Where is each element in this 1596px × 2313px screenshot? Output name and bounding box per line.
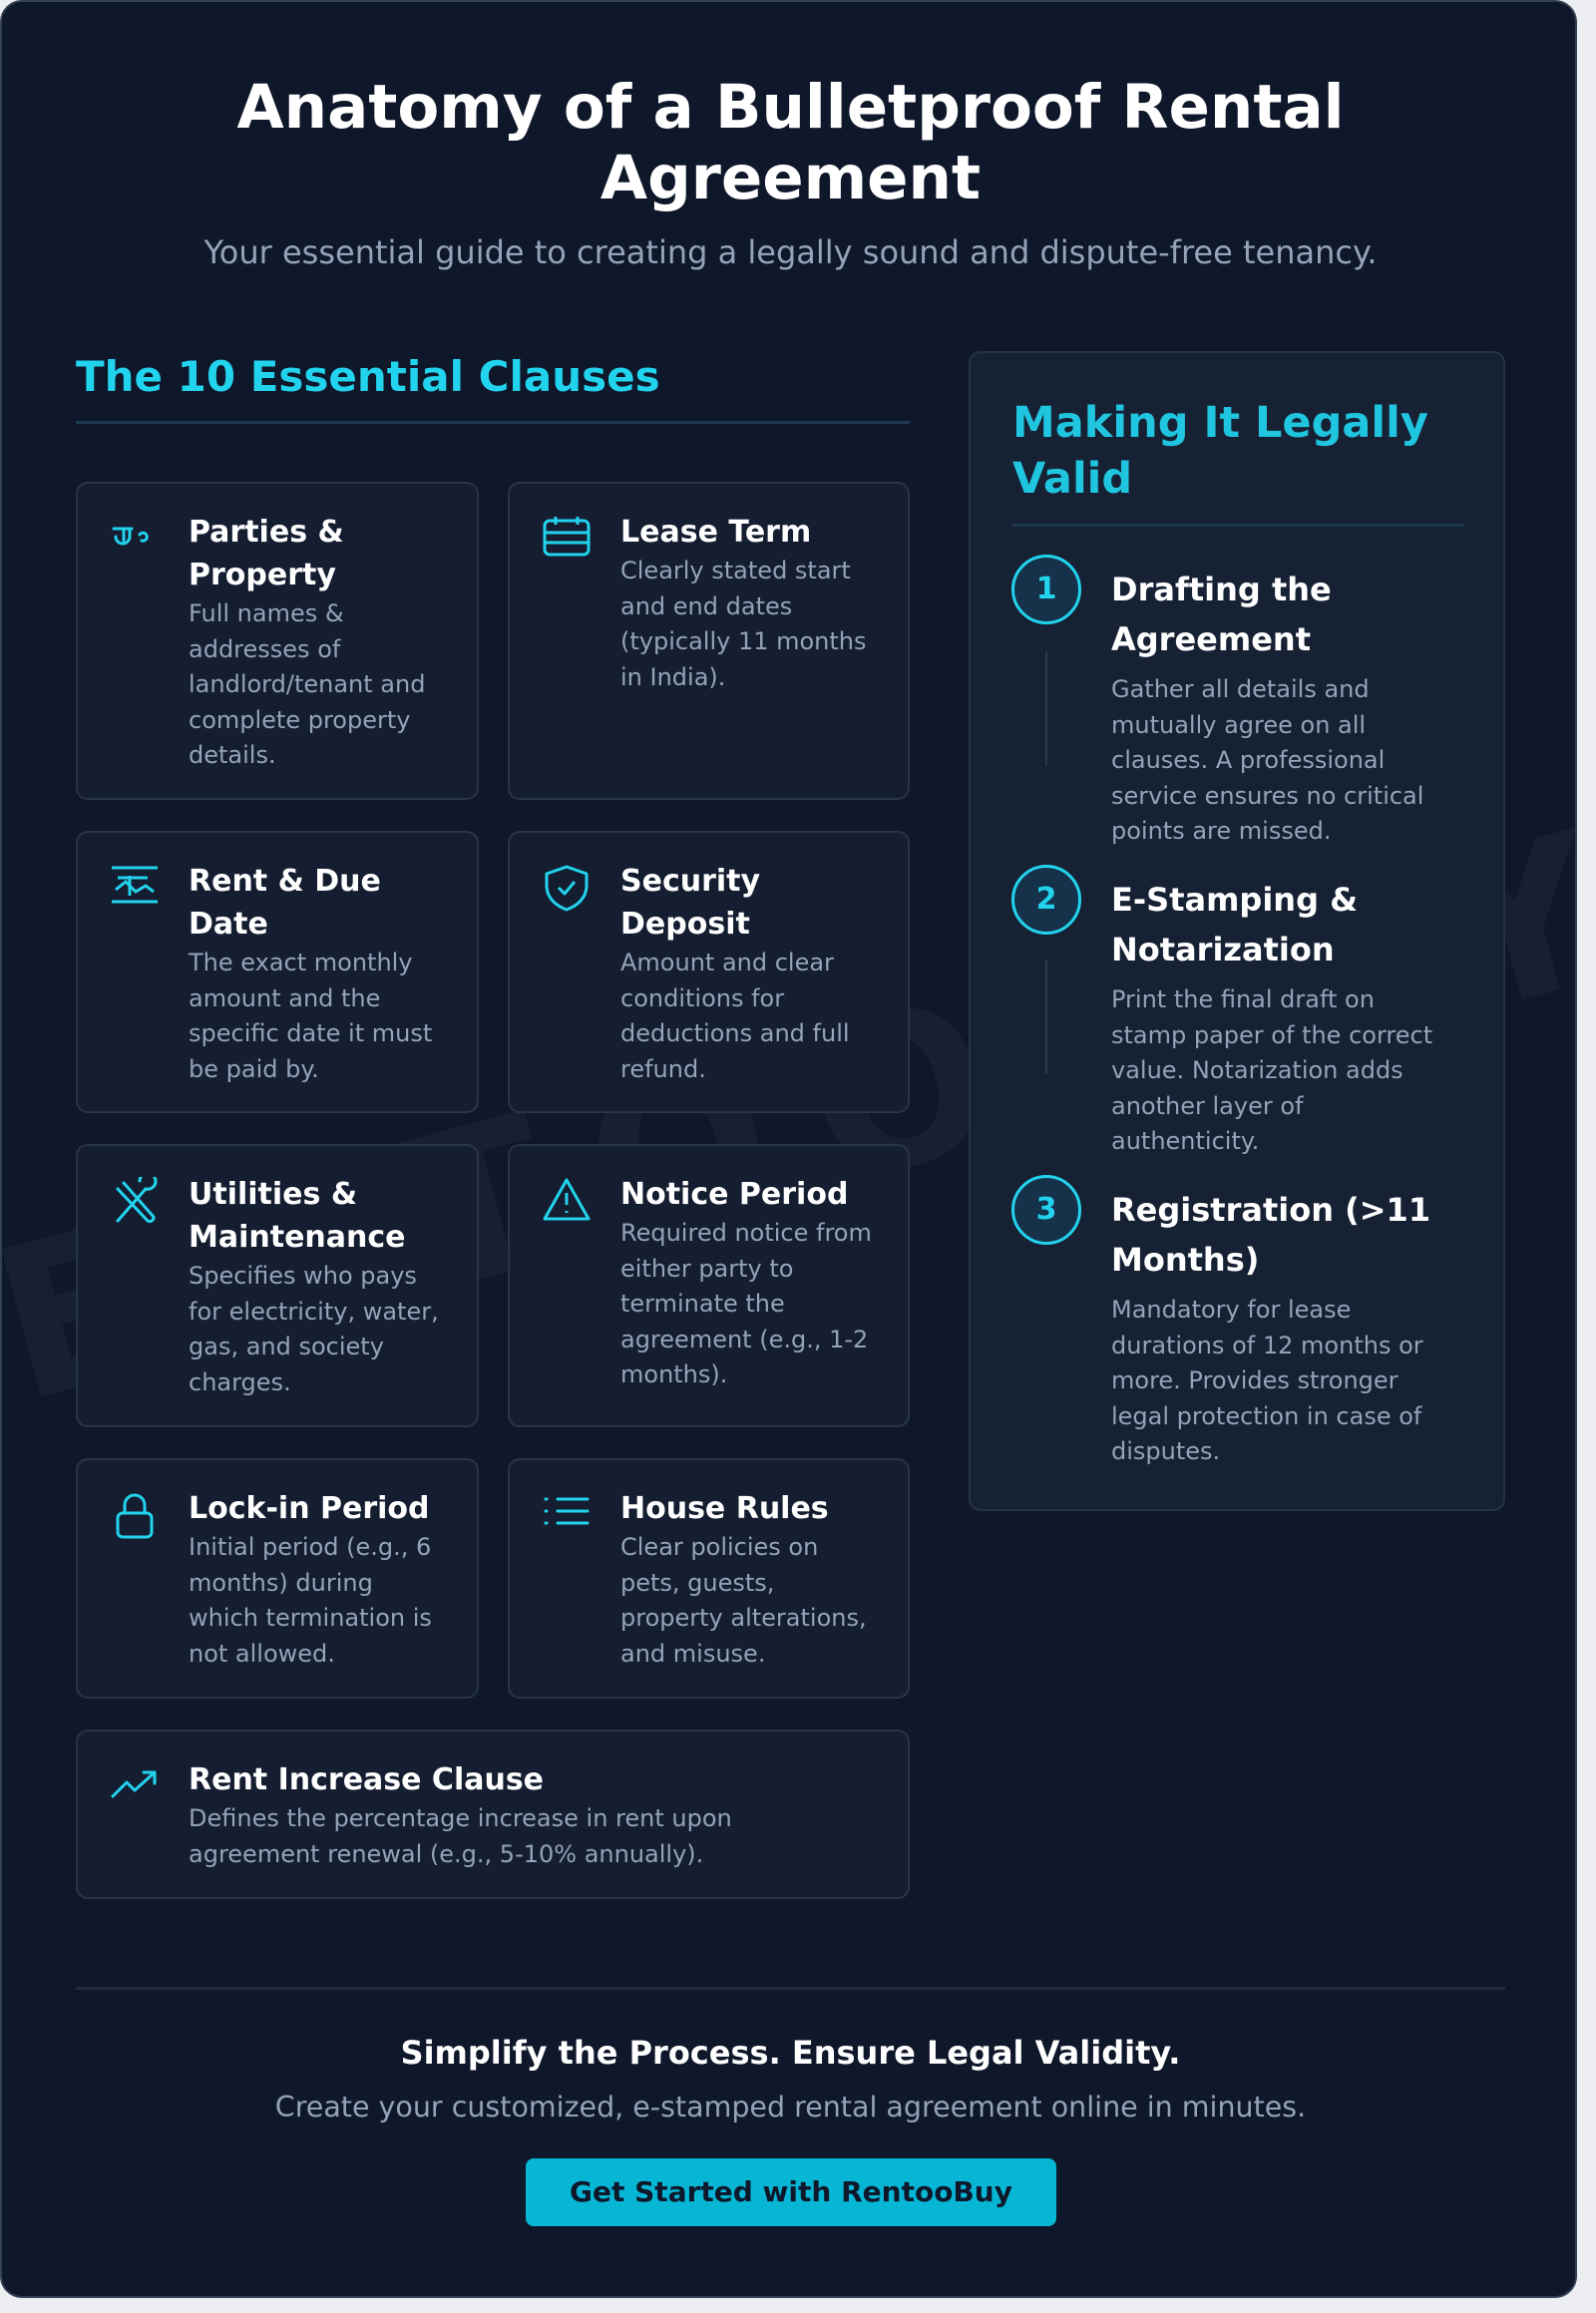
step 3: Mandatory for lease durations of 12 months or more. Provides stronger legal protection in case of disputes. [1111,1296,1423,1465]
heading: clauses: The 10 Essential Clauses [76,352,660,401]
step 3 [1011,1175,1430,1465]
card: notice [508,1144,910,1427]
card: parties: Full names & addresses of landlord/tenant and complete property details. [189,599,425,769]
step 2: 2 [1036,882,1056,917]
step 1 [1011,555,1423,845]
card: house rules [508,1458,910,1699]
card: lock-in: Lock-in Period [189,1491,429,1526]
card: rent increase: Defines the percentage increase in rent upon [189,1804,732,1832]
icon: lock [116,1494,154,1538]
step 2 [1011,865,1432,1155]
card: deposit: Security Deposit [620,864,760,942]
card: rent: Rent & Due Date [189,864,381,942]
card: deposit [508,831,910,1113]
icon: tools [116,1177,158,1223]
step 3: Registration (>11 Months) [1111,1191,1430,1279]
card: rent [76,831,479,1113]
card: rent increase: agreement renewal (e.g., 5-10% annually). [189,1839,703,1867]
icon: list [545,1498,589,1524]
subtitle: Your essential guide to creating a legally sound and dispute-free tenancy. [203,233,1377,271]
icon: rent [112,866,158,904]
icon: warning [543,1178,591,1221]
card: parties: Parties & Property [189,515,344,592]
step 2: Print the final draft on stamp paper of the correct value. Notarization adds another layer of authenticity. [1111,985,1432,1155]
title: Agreement [600,143,981,213]
heading: legally valid: Valid [1012,454,1132,504]
step 1: 1 [1036,572,1056,606]
icon: shield [545,866,589,912]
step 3: 3 [1036,1192,1056,1227]
card: rent increase [76,1730,910,1899]
card: notice: Notice Period [620,1177,848,1212]
panel: legally valid [969,351,1505,1511]
card: lock-in: Initial period (e.g., 6 months) during which termination is not allowed. [189,1533,432,1668]
card: notice: Required notice from either party to terminate the agreement (e.g., 1-2 months). [620,1219,872,1388]
icon: trend [111,1770,157,1798]
heading: legally valid: Making It Legally [1012,398,1428,448]
icon: calendar [543,517,591,557]
card: rent increase: Rent Increase Clause [189,1762,544,1797]
button: Get Started with RentooBuy [570,2175,1012,2208]
cta text: Create your customized, e-stamped rental agreement online in minutes. [275,2091,1306,2123]
step 1: Drafting the Agreement [1111,571,1332,658]
button [526,2158,1056,2226]
icon: parties [112,527,149,545]
card: lock-in [76,1458,479,1699]
card: utilities: Utilities & Maintenance [189,1177,406,1255]
cta heading: Simplify the Process. Ensure Legal Validity. [401,2034,1180,2072]
step 1: Gather all details and mutually agree on all clauses. A professional service ensures no critical points are missed. [1111,675,1423,845]
card: house rules: House Rules [620,1491,829,1526]
card: utilities [76,1144,479,1427]
step 2: E-Stamping & Notarization [1111,881,1358,968]
card: lease term: Clearly stated start and end dates (typically 11 months in India). [620,557,867,690]
card: parties [76,482,479,800]
card: rent: The exact monthly amount and the specific date it must be paid by. [189,949,432,1083]
heading: clauses [76,349,910,424]
card: house rules: Clear policies on pets, guests, property alterations, and misuse. [620,1533,867,1668]
card: utilities: Specifies who pays for electricity, water, gas, and society charges. [189,1262,439,1396]
card: deposit: Amount and clear conditions for deductions and full refund. [620,949,850,1083]
card: lease term: Lease Term [620,515,811,550]
title [236,72,1345,213]
title: Anatomy of a Bulletproof Rental [236,72,1345,143]
heading: legally valid [1012,395,1463,527]
card: lease term [508,482,910,800]
